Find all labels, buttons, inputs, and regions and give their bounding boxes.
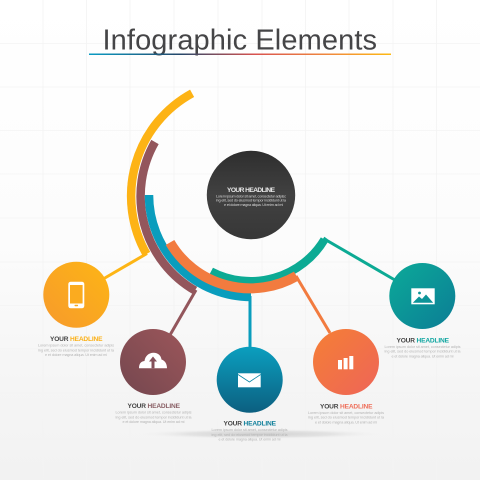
body text: ing elit, sed do eiusmod tempor incididunt ut la	[308, 416, 385, 420]
center body text: Lorem ipsum dolor sit amet, consectetur adipisc	[216, 194, 286, 198]
body text: ing elit, sed do eiusmod tempor incididunt ut la	[384, 350, 461, 354]
node: brown cloud	[116, 329, 192, 424]
body text: ing elit, sed do eiusmod tempor incididunt ut la	[38, 348, 115, 352]
icon: envelope	[238, 373, 261, 387]
title: Infographic Elements	[102, 24, 377, 56]
node: yellow phone	[38, 262, 115, 357]
headline: YOUR HEADLINE	[320, 404, 373, 410]
icon: bar chart	[338, 356, 353, 369]
body text: ing elit, sed do eiusmod tempor incididunt ut la	[212, 433, 288, 437]
node: orange chart	[308, 329, 385, 424]
connector: orange	[296, 276, 330, 333]
body text: e et dolore magna aliqua. Ut enim ad mi	[315, 420, 377, 424]
body text: e et dolore magna aliqua. Ut enim ad mi	[392, 354, 454, 358]
arc: orange	[170, 242, 296, 288]
center body text: e et dolore magna aliqua. Ut enim ad mi	[224, 203, 283, 207]
body text	[308, 411, 385, 424]
center headline: YOUR HEADLINE	[227, 187, 276, 194]
connector: yellow	[104, 254, 147, 278]
icon: smartphone	[68, 282, 84, 308]
connector: teal	[324, 238, 394, 280]
arc: yellow	[131, 93, 192, 254]
icon: cloud upload	[139, 353, 167, 368]
center dark circle	[207, 151, 295, 239]
body text: Lorem ipsum dolor sit amet, consectetur adipis	[384, 345, 461, 349]
ground shadow	[140, 429, 380, 439]
center body text	[216, 194, 287, 207]
icon: picture	[411, 288, 435, 304]
body text: ing elit, sed do eiusmod tempor incididunt ut la	[116, 415, 192, 419]
body text	[384, 345, 461, 358]
body text: Lorem ipsum dolor sit amet, consectetur adipis	[116, 411, 192, 415]
node: teal image	[384, 263, 461, 358]
body text: Lorem ipsum dolor sit amet, consectetur adipis	[38, 344, 114, 348]
body text: e et dolore magna aliqua. Ut enim ad mi	[45, 353, 107, 357]
center body text: ing elit, sed do eiusmod tempor incididunt ut la	[216, 199, 287, 203]
headline: YOUR HEADLINE	[128, 403, 181, 410]
connector: brown	[170, 290, 196, 335]
headline: YOUR HEADLINE	[50, 336, 103, 343]
body text	[116, 411, 192, 424]
concentric arcs	[131, 93, 324, 297]
headline: YOUR HEADLINE	[396, 337, 450, 344]
body text: e et dolore magna aliqua. Ut enim ad mi	[218, 438, 281, 442]
body text: Lorem ipsum dolor sit amet, consectetur adipis	[212, 428, 288, 432]
body text	[212, 428, 288, 442]
arc: blue	[149, 195, 251, 297]
connector: blue	[248, 296, 252, 350]
body text: Lorem ipsum dolor sit amet, consectetur adipis	[308, 411, 384, 415]
arc: brown	[141, 142, 195, 290]
body text: e et dolore magna aliqua. Ut enim ad mi	[122, 420, 185, 424]
body text	[38, 344, 115, 357]
node: blue mail	[212, 347, 288, 442]
arc: teal	[211, 240, 324, 281]
headline: YOUR HEADLINE	[224, 420, 277, 428]
